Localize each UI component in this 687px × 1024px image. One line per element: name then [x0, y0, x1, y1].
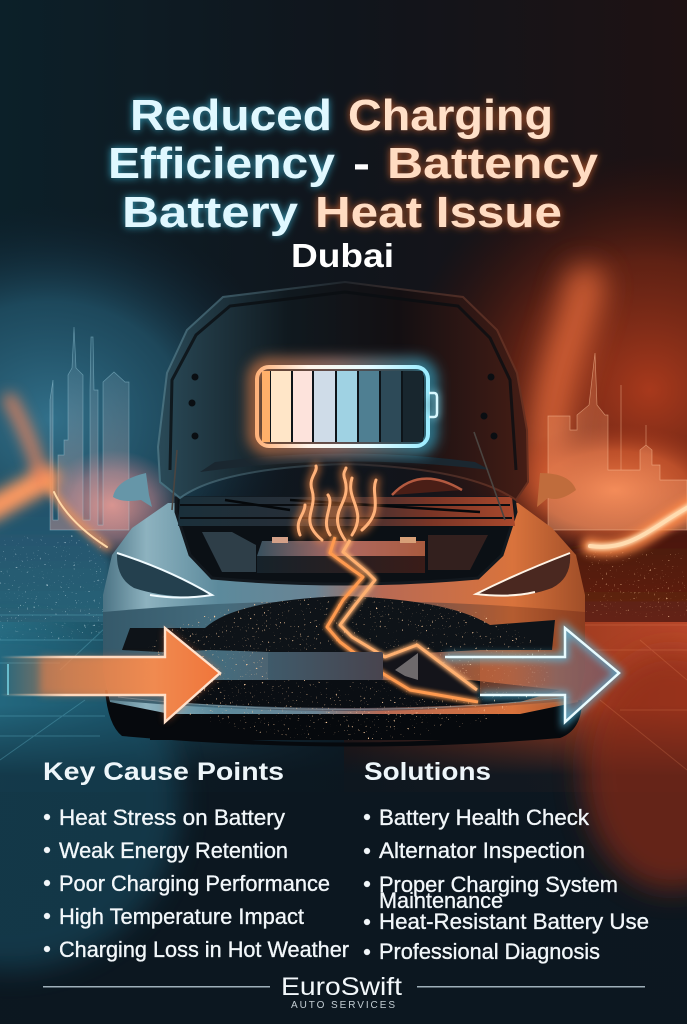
title: - [353, 139, 370, 188]
list: key causes [44, 805, 349, 962]
grille [122, 596, 555, 655]
title: Charging [348, 91, 553, 140]
car [103, 282, 585, 747]
title: Efficiency [108, 139, 336, 188]
list: solutions: Alternator Inspection [379, 838, 585, 863]
open hood [158, 282, 528, 500]
flames [298, 466, 376, 540]
battery icon [255, 365, 437, 448]
list: solutions: Heat-Resistant Battery Use [379, 909, 649, 934]
list: key causes: Heat Stress on Battery [59, 805, 285, 830]
hood struts [172, 432, 505, 520]
fire wave: right [590, 505, 687, 548]
lower intake [170, 680, 560, 708]
mirror left [113, 473, 152, 507]
bumper line [118, 697, 570, 710]
engine battery box [257, 537, 425, 573]
list: solutions [364, 805, 649, 964]
car body [103, 503, 585, 714]
list: solutions: Professional Diagnosis [379, 939, 600, 964]
crack lightning [327, 537, 478, 702]
arrow: orange incoming [0, 628, 220, 722]
list: key causes: High Temperature Impact [59, 904, 304, 929]
fire wave: left [0, 400, 107, 547]
under-car shadow and tyres [105, 690, 582, 747]
footer brand: AUTO SERVICES [291, 1000, 395, 1011]
footer brand: EuroSwift [281, 973, 402, 1001]
engine left [202, 532, 256, 572]
list: solutions: Proper Charging System [379, 872, 618, 897]
title: Reduced [130, 91, 332, 140]
headlight right [476, 553, 570, 596]
list: solutions: Maintenance [379, 888, 503, 913]
title [108, 91, 599, 237]
arrow: blue outgoing [445, 628, 619, 722]
title: Battency [387, 139, 599, 188]
licence plate [268, 652, 418, 680]
headlight left [117, 553, 212, 598]
title: Heat Issue [315, 188, 562, 237]
list: key causes: Weak Energy Retention [59, 838, 288, 863]
engine right [428, 535, 488, 570]
list: solutions: Battery Health Check [379, 805, 590, 830]
windscreen, cowl and engine bay [176, 479, 516, 584]
lower body [103, 601, 585, 711]
skyline: left city [50, 327, 129, 530]
subtitle: Dubai: Dubai [291, 237, 394, 274]
heading: solutions: Solutions [364, 758, 491, 786]
skyline: right city [548, 353, 687, 530]
list: key causes: Poor Charging Performance [59, 871, 330, 896]
sparks [140, 596, 550, 740]
title: Battery [122, 188, 299, 237]
footer brand [43, 973, 645, 1011]
mirror right [537, 473, 576, 507]
heading: key cause points: Key Cause Points [43, 758, 284, 786]
list: key causes: Charging Loss in Hot Weather [59, 937, 349, 962]
